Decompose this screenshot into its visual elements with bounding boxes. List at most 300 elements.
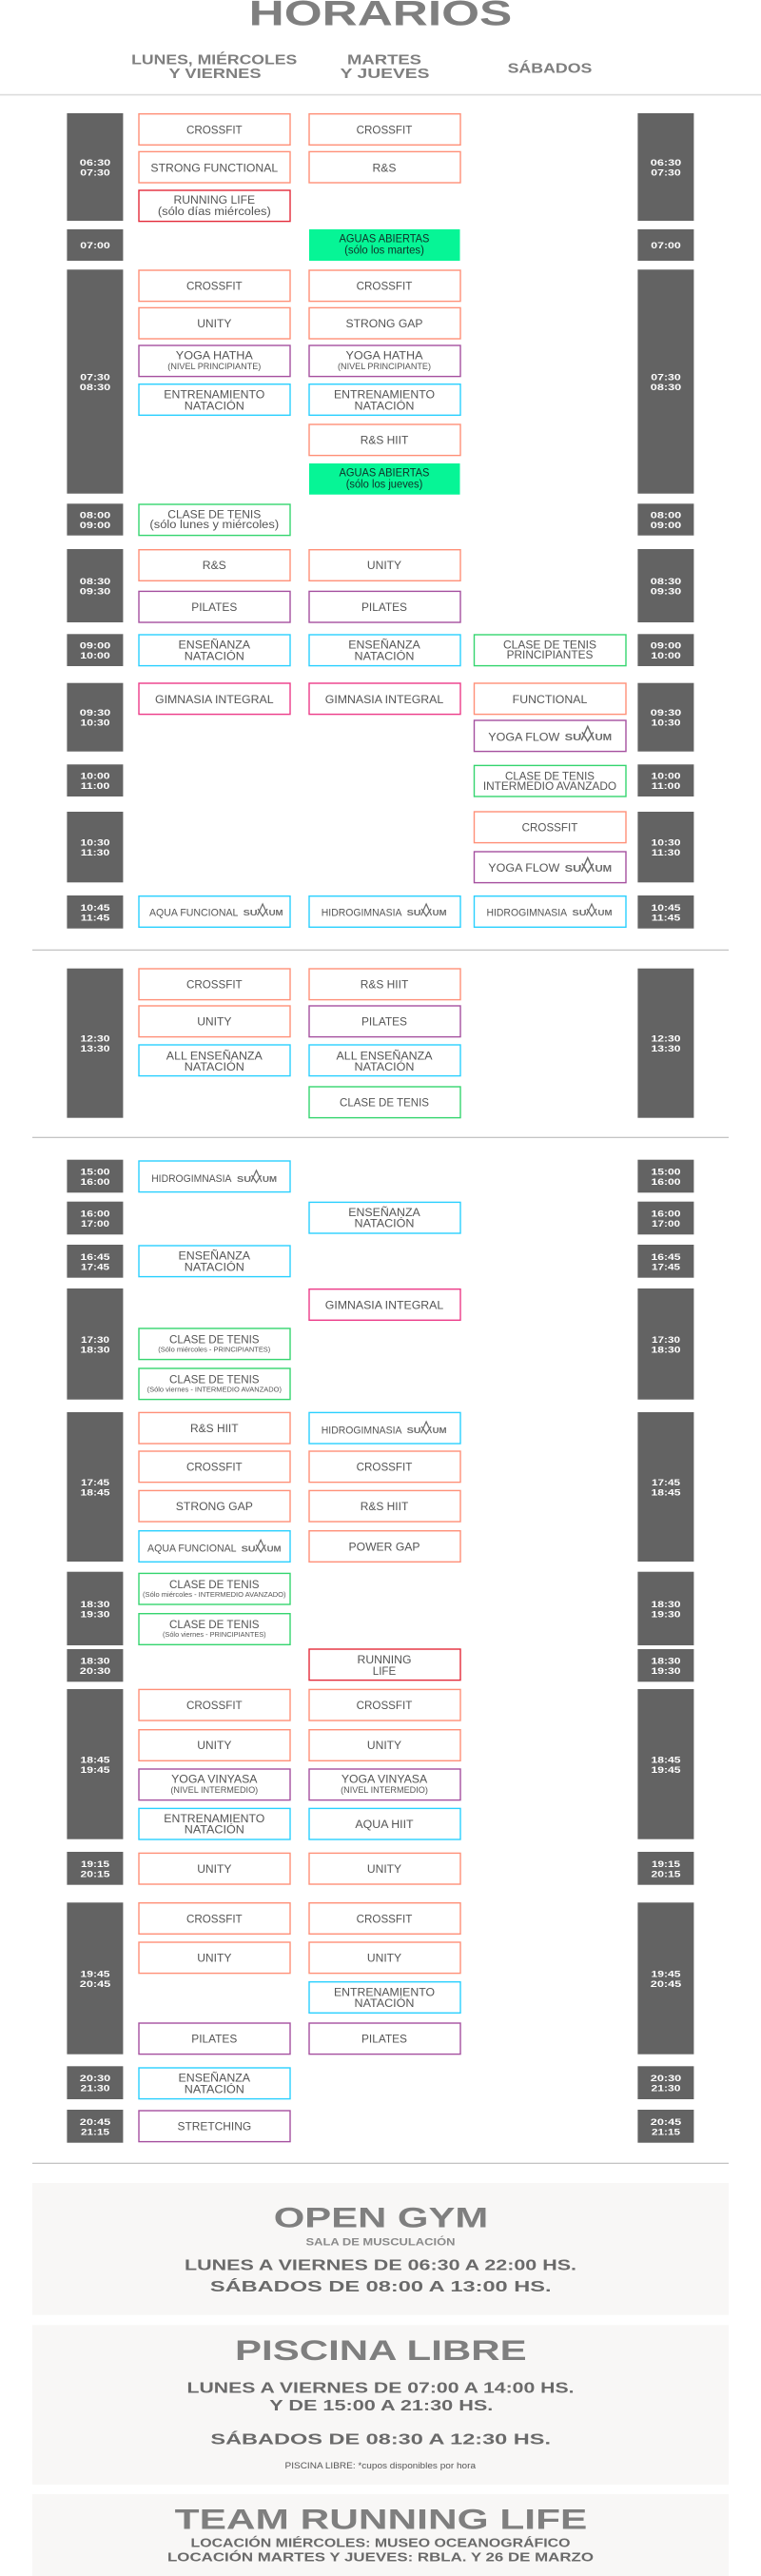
class: enseñanza natación: NATACIÓN xyxy=(354,1216,415,1230)
time block right: 07:30-08:30: 07:30 xyxy=(651,373,681,383)
class: unity: UNITY xyxy=(197,317,231,330)
time block right: 20:30-21:30: 21:30 xyxy=(651,2084,681,2094)
time block left: 18:30-20:30: 18:30 xyxy=(80,1656,110,1667)
class: yoga vinyasa: YOGA VINYASA xyxy=(341,1773,428,1786)
panel: team running life xyxy=(32,2494,729,2576)
hours: open gym: LUNES A VIERNES DE 06:30 A 22:00 HS. xyxy=(185,2258,576,2274)
hours: piscina libre xyxy=(186,2381,575,2448)
time block right: 18:30-19:30: 18:30 xyxy=(651,1600,681,1610)
class: aguas abiertas martes: (sólo los martes) xyxy=(344,244,424,257)
time block right: 18:30-19:30: 19:30 xyxy=(651,1609,681,1620)
class: enseñanza natación xyxy=(309,1202,460,1233)
class: unity: UNITY xyxy=(367,1739,401,1752)
logo: summum: UM xyxy=(263,1174,277,1184)
class: aqua funcional summum: AQUA FUNCIONAL xyxy=(147,1544,237,1555)
time block right: 20:30-21:30: 20:30 xyxy=(651,2074,681,2084)
logo: summum: SU xyxy=(407,1426,421,1435)
class: yoga hatha: (NIVEL PRINCIPIANTE) xyxy=(167,362,261,371)
class: clase de tenis: CLASE DE TENIS xyxy=(167,507,261,521)
class: clase de tenis principiantes: CLASE DE TENIS xyxy=(503,638,596,651)
time block right: 10:45-11:45 xyxy=(637,895,693,929)
time block left: 06:30-07:30 xyxy=(67,113,123,221)
class: all enseñanza natación: ALL ENSEÑANZA xyxy=(337,1049,433,1062)
time block right: 08:00-09:00: 08:00 xyxy=(651,510,681,521)
class: clase de tenis viernes principiantes xyxy=(139,1614,290,1644)
class: clase de tenis principiantes xyxy=(474,635,626,666)
time block right: 06:30-07:30 xyxy=(637,113,693,221)
class: crossfit xyxy=(309,1451,460,1483)
time block right: 10:30-11:30: 10:30 xyxy=(651,837,681,849)
class: crossfit xyxy=(139,1451,290,1483)
time block left: 06:30-07:30: 07:30 xyxy=(80,167,110,179)
time block left: 18:45-19:45: 19:45 xyxy=(80,1765,110,1776)
locations: LOCACIÓN MIÉRCOLES: MUSEO OCEANOGRÁFICO xyxy=(190,2535,571,2549)
class: enseñanza natación xyxy=(309,635,460,666)
time block right: 06:30-07:30: 07:30 xyxy=(651,167,681,179)
class: clase de tenis miércoles intermedio avanzado: CLASE DE TENIS xyxy=(169,1578,260,1591)
column heading: lunes, miércoles y viernes: Y VIERNES xyxy=(169,67,262,82)
time block left: 07:30-08:30: 08:30 xyxy=(80,383,110,393)
time block right: 16:45-17:45: 16:45 xyxy=(651,1252,681,1263)
class: r&s xyxy=(309,151,460,183)
time block right: 18:45-19:45: 18:45 xyxy=(651,1755,681,1766)
class: crossfit: CROSSFIT xyxy=(357,1461,413,1474)
class: crossfit xyxy=(139,1689,290,1721)
time block left: 09:30-10:30: 09:30 xyxy=(80,708,110,718)
time block left: 10:30-11:30: 10:30 xyxy=(80,837,110,849)
class: clase de tenis miércoles intermedio avanzado: (Sólo miércoles - INTERMEDIO AVANZADO) xyxy=(143,1590,286,1599)
time block right: 18:30-19:30: 19:30 xyxy=(651,1666,681,1677)
time block right: 16:45-17:45: 17:45 xyxy=(652,1262,681,1272)
time block right: 10:30-11:30: 11:30 xyxy=(652,848,680,858)
class: crossfit xyxy=(309,1903,460,1934)
class: yoga flow summum xyxy=(474,852,626,883)
class: running life xyxy=(309,1649,460,1681)
time block right: 19:45-20:45: 20:45 xyxy=(651,1979,682,1990)
time block right: 06:30-07:30: 06:30 xyxy=(651,158,681,168)
class: pilates: PILATES xyxy=(361,2033,407,2046)
time block right: 07:00: 07:00 xyxy=(651,241,681,251)
class: strong gap: STRONG GAP xyxy=(346,317,422,330)
class: enseñanza natación xyxy=(139,635,290,666)
time block right: 09:30-10:30: 10:30 xyxy=(651,718,681,729)
class: enseñanza natación: ENSEÑANZA xyxy=(179,1249,251,1263)
class: yoga vinyasa xyxy=(309,1769,460,1800)
time block left: 18:30-19:30: 18:30 xyxy=(80,1600,110,1610)
logo: summum: UM xyxy=(269,908,283,917)
class: unity: UNITY xyxy=(367,559,401,572)
class: aqua hiit: AQUA HIIT xyxy=(355,1818,414,1831)
class: enseñanza natación: NATACIÓN xyxy=(185,648,244,662)
class: enseñanza natación: ENSEÑANZA xyxy=(179,639,251,652)
class: pilates xyxy=(139,591,290,622)
class: unity xyxy=(309,1853,460,1884)
time block left: 10:45-11:45 xyxy=(67,895,123,929)
locations: LOCACIÓN MARTES Y JUEVES: RBLA. Y 26 DE MARZO xyxy=(167,2550,594,2565)
time block right: 17:45-18:45: 18:45 xyxy=(651,1488,681,1498)
logo: summum xyxy=(565,857,612,875)
class: gimnasia integral: GIMNASIA INTEGRAL xyxy=(325,1298,443,1311)
class: all enseñanza natación: NATACIÓN xyxy=(354,1059,415,1073)
class: enseñanza natación: ENSEÑANZA xyxy=(348,639,421,652)
time block left: 20:30-21:30: 20:30 xyxy=(80,2074,110,2084)
time block left: 18:45-19:45: 18:45 xyxy=(80,1755,110,1766)
class: gimnasia integral: GIMNASIA INTEGRAL xyxy=(325,693,443,706)
class: gimnasia integral: GIMNASIA INTEGRAL xyxy=(155,693,274,706)
time block left: 18:30-19:30 xyxy=(67,1572,123,1645)
class: functional xyxy=(474,683,626,715)
time block right: 09:30-10:30 xyxy=(637,683,693,752)
class: yoga hatha xyxy=(139,345,290,377)
logo: summum: SU xyxy=(242,1544,256,1553)
class: functional: FUNCTIONAL xyxy=(513,693,588,706)
time block left: 18:30-20:30 xyxy=(67,1649,123,1681)
time block right: 09:00-10:00: 10:00 xyxy=(651,651,681,661)
time block left: 08:00-09:00 xyxy=(67,503,123,536)
logo: summum xyxy=(407,904,447,917)
time block left: 17:45-18:45: 18:45 xyxy=(80,1488,110,1498)
class: crossfit: CROSSFIT xyxy=(186,1699,243,1712)
class: entrenamiento natación: ENTRENAMIENTO xyxy=(164,1812,264,1825)
time block left: 10:00-11:00 xyxy=(67,764,123,796)
logo: summum xyxy=(242,1540,282,1553)
class: entrenamiento natación xyxy=(139,1808,290,1839)
time block left: 09:00-10:00: 09:00 xyxy=(80,641,110,651)
class: clase de tenis miércoles principiantes: CLASE DE TENIS xyxy=(169,1332,260,1346)
time block left: 17:45-18:45 xyxy=(67,1412,123,1562)
time block left: 16:00-17:00: 17:00 xyxy=(81,1219,109,1229)
time block left: 10:00-11:00: 10:00 xyxy=(80,771,110,782)
class: unity: UNITY xyxy=(197,1015,231,1029)
locations xyxy=(167,2535,594,2565)
class: r&s hiit xyxy=(309,1490,460,1522)
class: pilates: PILATES xyxy=(191,600,237,614)
time block left: 16:45-17:45 xyxy=(67,1245,123,1278)
column heading: lunes, miércoles y viernes: LUNES, MIÉRCOLES xyxy=(131,52,298,69)
time block right: 08:30-09:30 xyxy=(637,549,693,622)
time block right: 18:30-19:30: 18:30 xyxy=(651,1656,681,1667)
class: pilates: PILATES xyxy=(361,600,407,614)
class: strong functional xyxy=(139,151,290,183)
class: enseñanza natación: NATACIÓN xyxy=(185,1259,244,1273)
class: power gap xyxy=(309,1531,460,1562)
class: clase de tenis viernes principiantes: CLASE DE TENIS xyxy=(169,1618,260,1631)
class: aqua funcional summum xyxy=(139,1531,290,1562)
class: clase de tenis miércoles principiantes xyxy=(139,1328,290,1360)
time block left: 18:30-20:30: 20:30 xyxy=(80,1666,110,1677)
logo: summum: UM xyxy=(433,908,447,917)
class: unity: UNITY xyxy=(197,1862,231,1876)
class: clase de tenis intermedio avanzado: CLASE DE TENIS xyxy=(505,770,595,783)
time block right: 09:00-10:00: 09:00 xyxy=(651,641,681,651)
time block right: 08:00-09:00: 09:00 xyxy=(651,521,681,531)
class: clase de tenis miércoles intermedio avanzado xyxy=(139,1573,290,1604)
class: clase de tenis viernes principiantes: (Sólo viernes - PRINCIPIANTES) xyxy=(163,1630,266,1639)
subheading: sala de musculación: SALA DE MUSCULACIÓN xyxy=(306,2235,455,2248)
class: aguas abiertas martes: AGUAS ABIERTAS xyxy=(340,232,429,246)
time block right: 19:45-20:45: 19:45 xyxy=(651,1970,681,1979)
class: unity xyxy=(139,307,290,339)
class: aguas abiertas jueves: (sólo los jueves) xyxy=(346,478,422,491)
class: unity xyxy=(309,1730,460,1760)
time block right: 15:00-16:00: 15:00 xyxy=(651,1167,681,1178)
time block right: 16:00-17:00: 17:00 xyxy=(652,1219,680,1229)
time block left: 08:30-09:30: 08:30 xyxy=(80,577,110,587)
time block left: 07:00: 07:00 xyxy=(80,241,110,251)
class: entrenamiento natación xyxy=(309,1982,460,2013)
class: clase de tenis: CLASE DE TENIS xyxy=(340,1096,429,1110)
class: r&s: R&S xyxy=(203,559,226,572)
time block right: 17:30-18:30: 18:30 xyxy=(651,1345,681,1355)
hours: piscina libre: LUNES A VIERNES DE 07:00 A 14:00 HS. xyxy=(186,2381,575,2397)
class: entrenamiento natación: NATACIÓN xyxy=(354,398,415,412)
time block left: 10:00-11:00: 11:00 xyxy=(81,781,109,792)
time block left: 15:00-16:00: 15:00 xyxy=(80,1167,110,1178)
class: enseñanza natación xyxy=(139,2068,290,2099)
time block left: 17:30-18:30 xyxy=(67,1288,123,1400)
time block right: 12:30-13:30 xyxy=(637,969,693,1118)
logo: summum: SU xyxy=(237,1174,251,1184)
class: entrenamiento natación: NATACIÓN xyxy=(354,1996,415,2010)
class: crossfit xyxy=(309,270,460,302)
class: all enseñanza natación xyxy=(309,1045,460,1076)
class: clase de tenis intermedio avanzado xyxy=(474,765,626,796)
class: crossfit xyxy=(309,114,460,145)
class: r&s: R&S xyxy=(373,161,396,174)
class: crossfit xyxy=(139,969,290,1000)
time block left: 18:45-19:45 xyxy=(67,1689,123,1839)
heading: open gym: OPEN GYM xyxy=(274,2203,488,2234)
class: enseñanza natación: NATACIÓN xyxy=(185,2081,244,2095)
class: running life: LIFE xyxy=(373,1664,396,1678)
time block left: 17:30-18:30: 18:30 xyxy=(80,1345,110,1355)
time block right: 09:00-10:00 xyxy=(637,634,693,666)
time block left: 16:45-17:45: 16:45 xyxy=(80,1252,110,1263)
time block right: 08:30-09:30: 08:30 xyxy=(651,577,681,587)
class: aguas abiertas martes xyxy=(309,229,460,261)
time block left: 19:45-20:45: 20:45 xyxy=(80,1979,111,1990)
class: hidrogimnasia summum: HIDROGIMNASIA xyxy=(322,908,402,919)
logo: summum xyxy=(407,1422,447,1435)
column heading: lunes, miércoles y viernes xyxy=(131,52,298,82)
time block right: 10:00-11:00: 11:00 xyxy=(652,781,680,792)
time block right: 07:30-08:30 xyxy=(637,269,693,494)
class: strong functional: STRONG FUNCTIONAL xyxy=(150,161,278,174)
time block right: 17:30-18:30 xyxy=(637,1288,693,1400)
time block left: 09:00-10:00 xyxy=(67,634,123,666)
time block left: 17:30-18:30: 17:30 xyxy=(81,1335,109,1346)
class: enseñanza natación: ENSEÑANZA xyxy=(179,2072,251,2085)
logo: summum: UM xyxy=(433,1426,447,1435)
logo: summum: SU xyxy=(407,908,421,917)
class: crossfit: CROSSFIT xyxy=(186,1912,243,1925)
class: running life: RUNNING xyxy=(358,1653,411,1666)
class: r&s hiit: R&S HIIT xyxy=(190,1422,239,1435)
class: clase de tenis xyxy=(139,504,290,536)
time block left: 20:30-21:30 xyxy=(67,2066,123,2099)
class: crossfit xyxy=(309,1689,460,1721)
time block right: 20:45-21:15: 21:15 xyxy=(652,2127,681,2137)
heading: piscina libre: PISCINA LIBRE xyxy=(235,2335,527,2367)
class: stretching: STRETCHING xyxy=(177,2120,251,2134)
class: power gap: POWER GAP xyxy=(348,1540,420,1553)
time block right: 17:45-18:45: 17:45 xyxy=(652,1478,681,1488)
class: r&s hiit xyxy=(309,969,460,1000)
time block right: 20:45-21:15: 20:45 xyxy=(651,2117,682,2128)
time block left: 16:00-17:00: 16:00 xyxy=(80,1209,110,1220)
time block right: 18:45-19:45 xyxy=(637,1689,693,1839)
class: entrenamiento natación: ENTRENAMIENTO xyxy=(334,388,435,402)
time block right: 10:45-11:45: 10:45 xyxy=(651,903,681,914)
class: strong gap: STRONG GAP xyxy=(176,1500,253,1513)
class: pilates xyxy=(309,591,460,622)
class: gimnasia integral xyxy=(309,1289,460,1320)
time block right: 07:00 xyxy=(637,229,693,261)
class: crossfit: CROSSFIT xyxy=(357,1912,413,1925)
class: pilates xyxy=(309,1006,460,1037)
logo: summum: SU xyxy=(565,864,581,875)
class: unity: UNITY xyxy=(197,1739,231,1752)
column heading: martes y jueves xyxy=(341,53,430,82)
class: r&s hiit xyxy=(139,1412,290,1444)
time block left: 06:30-07:30: 06:30 xyxy=(80,158,110,168)
time block right: 19:15-20:15 xyxy=(637,1852,693,1885)
class: r&s hiit: R&S HIIT xyxy=(361,1500,409,1513)
time block right: 16:00-17:00 xyxy=(637,1202,693,1234)
time block left: 20:45-21:15 xyxy=(67,2110,123,2143)
time block right: 10:00-11:00: 10:00 xyxy=(651,771,681,782)
time block right: 12:30-13:30: 13:30 xyxy=(651,1044,681,1054)
class: unity: UNITY xyxy=(367,1951,401,1964)
time block right: 09:30-10:30: 09:30 xyxy=(651,708,681,718)
class: pilates xyxy=(309,2023,460,2055)
class: crossfit: CROSSFIT xyxy=(186,280,243,293)
time block left: 15:00-16:00 xyxy=(67,1160,123,1192)
class: enseñanza natación: ENSEÑANZA xyxy=(348,1206,421,1219)
panel: piscina libre xyxy=(32,2325,729,2485)
time block left: 17:45-18:45: 17:45 xyxy=(81,1478,110,1488)
class: r&s hiit: R&S HIIT xyxy=(361,978,409,992)
hours: open gym: SÁBADOS DE 08:00 A 13:00 HS. xyxy=(210,2277,552,2295)
class: clase de tenis viernes intermedio avanzado xyxy=(139,1368,290,1400)
time block left: 10:45-11:45: 10:45 xyxy=(80,903,110,914)
class: strong gap xyxy=(309,307,460,339)
hours: open gym xyxy=(185,2258,576,2295)
class: yoga flow summum: YOGA FLOW xyxy=(488,861,560,875)
class: enseñanza natación xyxy=(139,1246,290,1277)
class: crossfit: CROSSFIT xyxy=(186,978,243,992)
class: running life: RUNNING LIFE xyxy=(173,193,255,206)
class: r&s xyxy=(139,550,290,580)
time block left: 08:30-09:30: 09:30 xyxy=(80,586,110,598)
time block right: 17:30-18:30: 17:30 xyxy=(652,1335,680,1346)
time block right: 10:30-11:30 xyxy=(637,812,693,882)
time block left: 19:15-20:15 xyxy=(67,1852,123,1885)
time block left: 20:45-21:15: 21:15 xyxy=(81,2127,110,2137)
class: r&s hiit xyxy=(309,424,460,456)
class: clase de tenis principiantes: PRINCIPIANTES xyxy=(507,648,593,661)
class: pilates: PILATES xyxy=(361,1015,407,1029)
time block left: 15:00-16:00: 16:00 xyxy=(80,1177,110,1188)
logo: summum: SU xyxy=(573,908,587,917)
logo: summum: UM xyxy=(595,733,612,743)
hours: piscina libre: SÁBADOS DE 08:30 A 12:30 HS. xyxy=(210,2429,551,2448)
class: hidrogimnasia summum xyxy=(309,1412,460,1444)
class: unity xyxy=(139,1942,290,1974)
time block left: 12:30-13:30: 12:30 xyxy=(80,1033,110,1045)
class: aqua funcional summum xyxy=(139,896,290,927)
class: hidrogimnasia summum: HIDROGIMNASIA xyxy=(486,908,568,919)
class: clase de tenis xyxy=(309,1087,460,1118)
time block left: 08:30-09:30 xyxy=(67,549,123,622)
class: unity: UNITY xyxy=(197,1951,231,1964)
time block right: 19:15-20:15: 20:15 xyxy=(651,1869,681,1879)
class: all enseñanza natación: ALL ENSEÑANZA xyxy=(166,1049,263,1062)
time block left: 08:00-09:00: 08:00 xyxy=(80,510,110,521)
time block right: 07:30-08:30: 08:30 xyxy=(651,383,681,393)
class: gimnasia integral xyxy=(139,683,290,715)
time block left: 10:45-11:45: 11:45 xyxy=(81,913,110,923)
time block left: 12:30-13:30 xyxy=(67,969,123,1118)
class: running life: (sólo días miércoles) xyxy=(158,205,271,218)
class: crossfit: CROSSFIT xyxy=(522,821,578,835)
class: yoga vinyasa: (NIVEL INTERMEDIO) xyxy=(341,1785,428,1795)
logo: summum: UM xyxy=(595,864,612,875)
time block right: 17:45-18:45 xyxy=(637,1412,693,1562)
time block left: 08:00-09:00: 09:00 xyxy=(80,521,110,531)
class: unity xyxy=(309,550,460,580)
class: unity xyxy=(309,1942,460,1974)
time block left: 12:30-13:30: 13:30 xyxy=(80,1044,110,1054)
class: hidrogimnasia summum xyxy=(474,896,626,927)
hours: piscina libre: Y DE 15:00 A 21:30 HS. xyxy=(269,2398,493,2414)
time block left: 07:30-08:30 xyxy=(67,269,123,494)
class: yoga vinyasa: (NIVEL INTERMEDIO) xyxy=(170,1785,258,1795)
class: clase de tenis viernes intermedio avanzado: (Sólo viernes - INTERMEDIO AVANZADO) xyxy=(147,1385,282,1393)
logo: summum: SU xyxy=(244,908,258,917)
class: entrenamiento natación xyxy=(309,384,460,415)
time block left: 16:00-17:00 xyxy=(67,1202,123,1234)
time block right: 18:30-19:30 xyxy=(637,1572,693,1645)
class: yoga flow summum xyxy=(474,720,626,752)
class: entrenamiento natación: NATACIÓN xyxy=(185,398,244,412)
class: crossfit xyxy=(474,812,626,843)
column heading: martes y jueves: Y JUEVES xyxy=(341,67,430,82)
class: yoga vinyasa: YOGA VINYASA xyxy=(171,1773,258,1786)
time block right: 19:15-20:15: 19:15 xyxy=(652,1859,681,1870)
class: hidrogimnasia summum: HIDROGIMNASIA xyxy=(151,1173,232,1185)
class: entrenamiento natación xyxy=(139,384,290,415)
time block left: 20:45-21:15: 20:45 xyxy=(80,2117,111,2128)
class: crossfit: CROSSFIT xyxy=(357,1699,413,1712)
time block left: 09:30-10:30 xyxy=(67,683,123,752)
logo: summum xyxy=(244,904,283,917)
class: crossfit xyxy=(139,114,290,145)
time block left: 10:30-11:30 xyxy=(67,812,123,882)
time block left: 16:45-17:45: 17:45 xyxy=(81,1262,110,1272)
class: clase de tenis viernes intermedio avanzado: CLASE DE TENIS xyxy=(169,1372,260,1386)
time block right: 18:45-19:45: 19:45 xyxy=(651,1765,681,1776)
time block left: 19:45-20:45 xyxy=(67,1902,123,2055)
class: crossfit: CROSSFIT xyxy=(186,124,243,137)
time block left: 07:00 xyxy=(67,229,123,261)
column heading: sábados: SÁBADOS xyxy=(508,61,593,77)
time block left: 19:15-20:15: 20:15 xyxy=(80,1869,110,1879)
class: gimnasia integral xyxy=(309,683,460,715)
logo: summum xyxy=(573,904,613,917)
class: unity xyxy=(139,1730,290,1760)
time block right: 20:45-21:15 xyxy=(637,2110,693,2143)
